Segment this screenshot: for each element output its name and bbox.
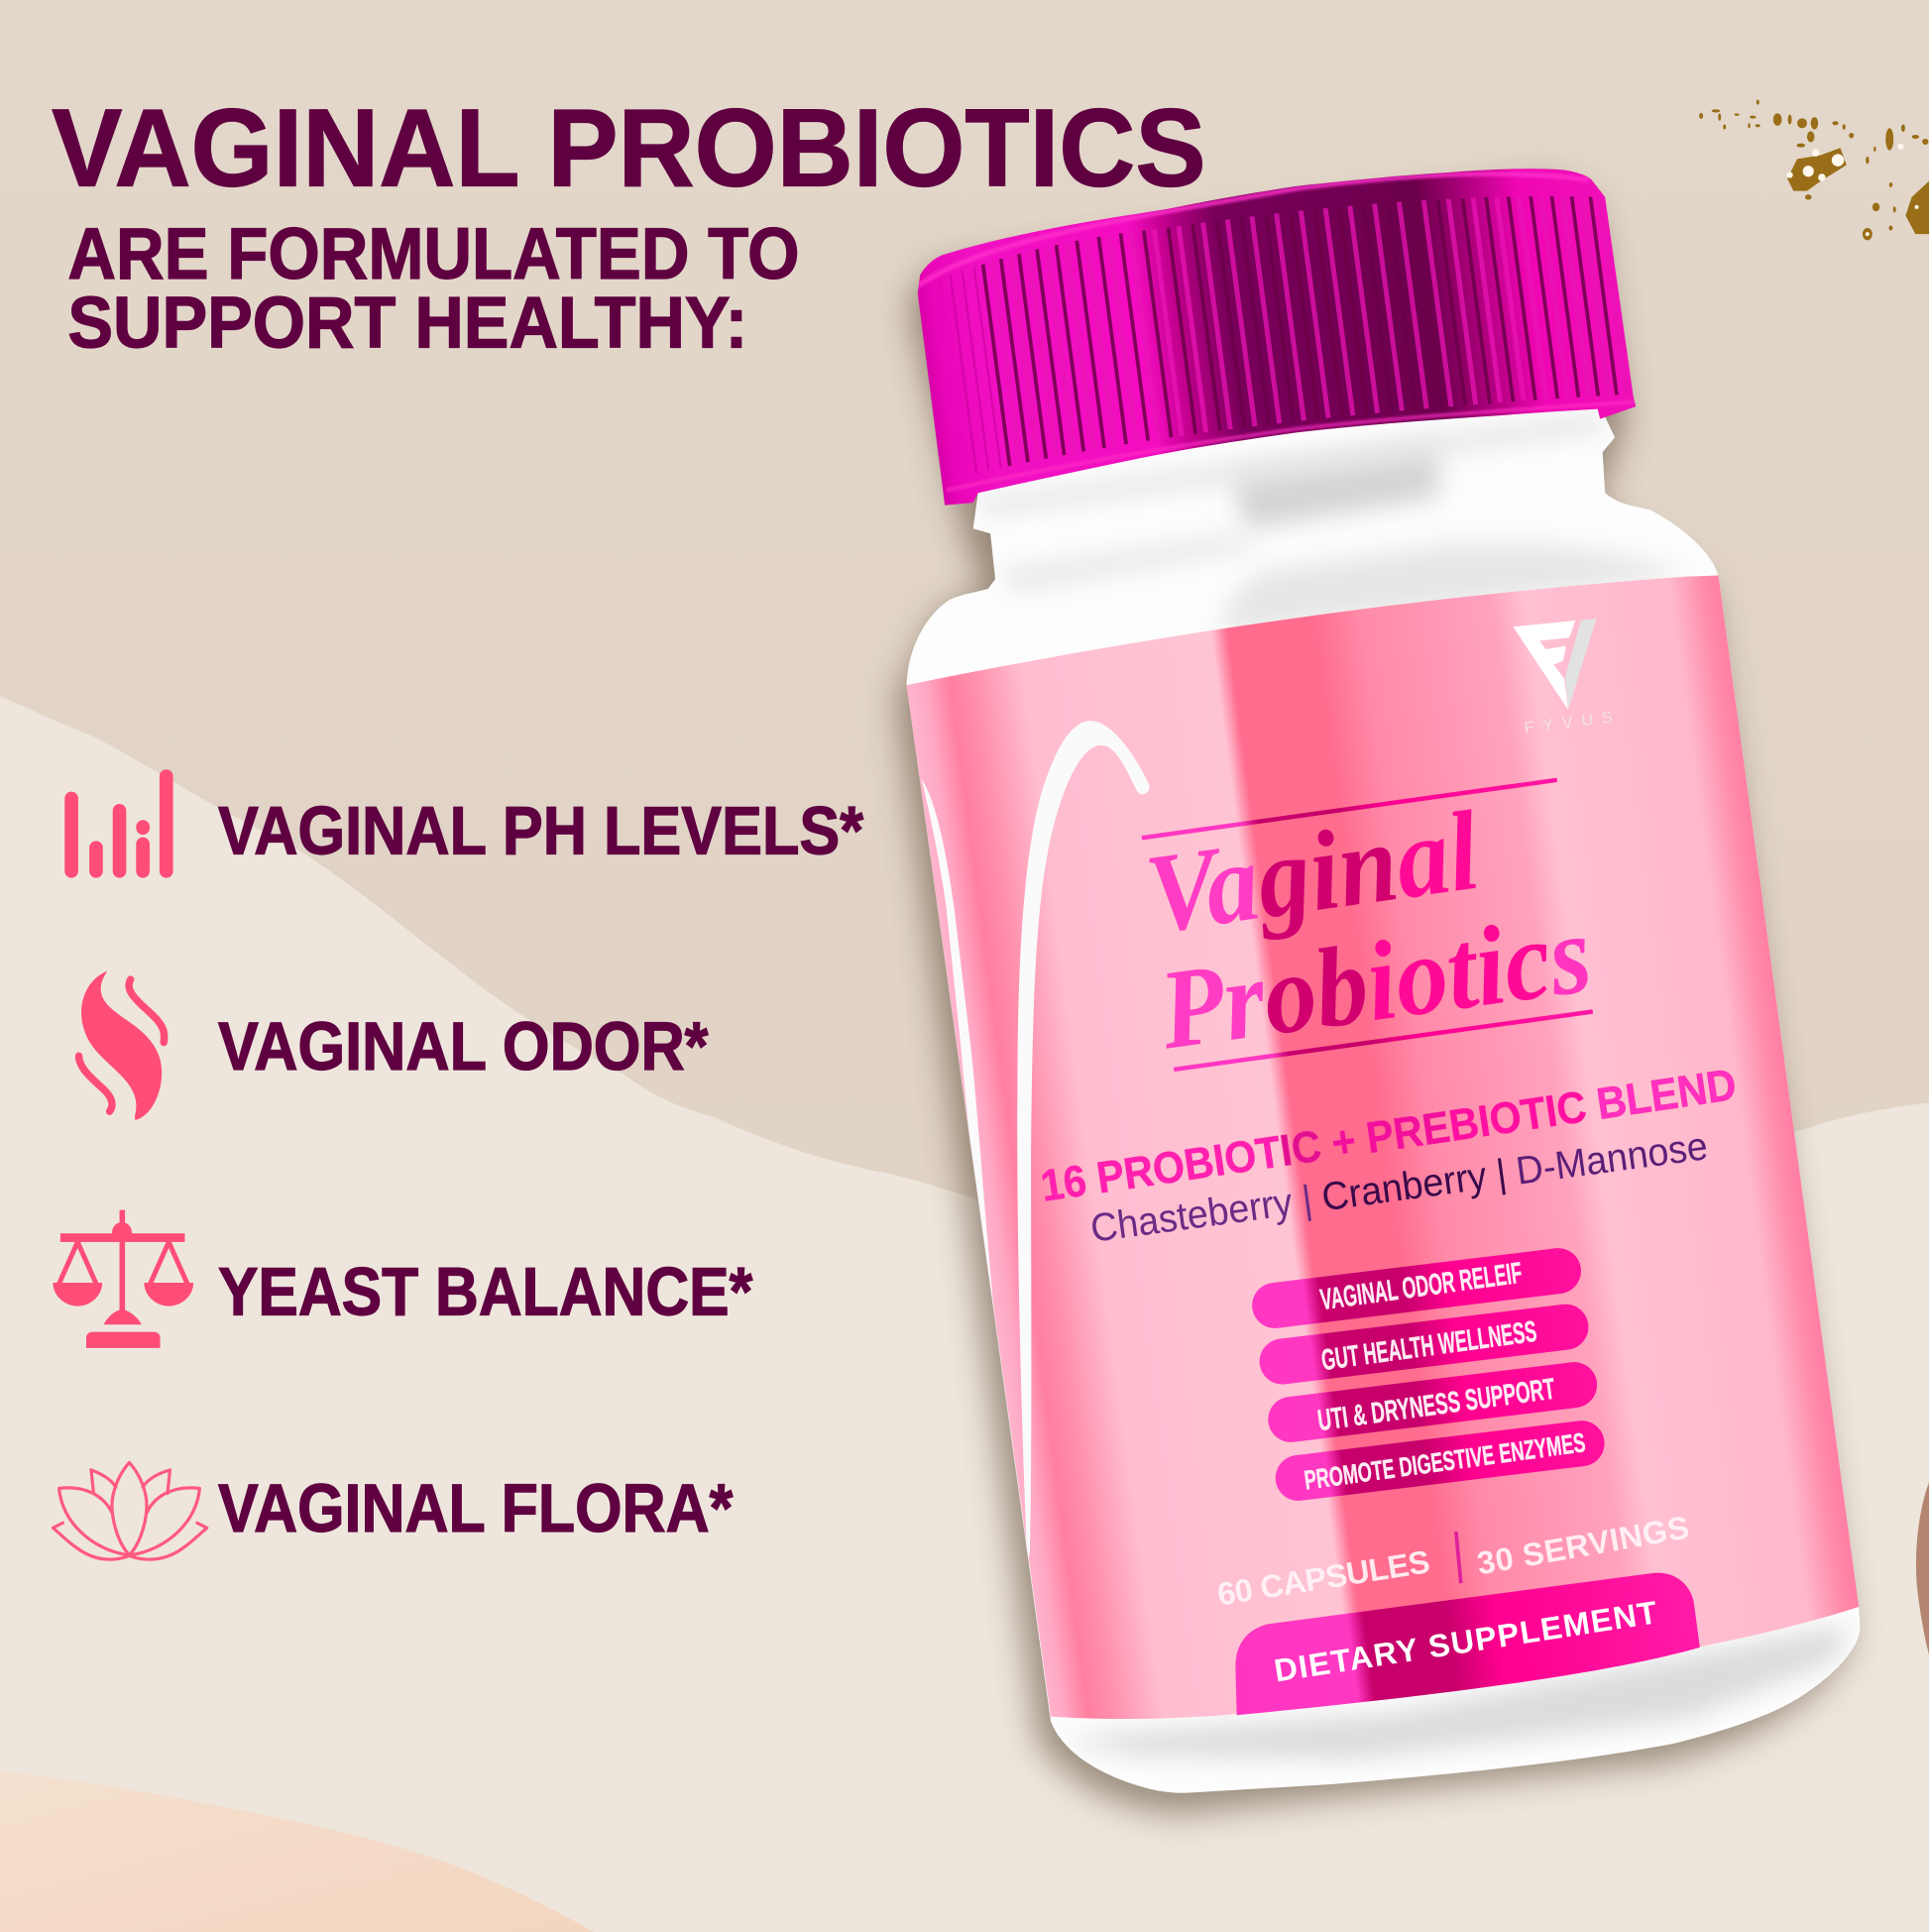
bottle label [907, 575, 1859, 1719]
bottle body [907, 406, 1860, 1793]
product title: Vaginal [1139, 787, 1486, 958]
benefit pill: digestive enzymes [1299, 1426, 1587, 1496]
icon: balance scales [53, 1210, 193, 1348]
capsule and serving count: 30 SERVINGS [1474, 1509, 1692, 1581]
heading: Vaginal Probiotics: VAGINAL PROBIOTICS [52, 86, 1206, 210]
blend headline: 16 PROBIOTIC + PREBIOTIC BLEND [1038, 1060, 1740, 1211]
product bottle [905, 169, 1860, 1793]
text: pH levels: VAGINAL PH LEVELS* [218, 793, 863, 868]
bottle cap [905, 169, 1656, 506]
background: cream wave [0, 696, 1929, 1932]
benefit pill: gut health [1283, 1315, 1565, 1377]
background: brown edge shape [1916, 1482, 1929, 1654]
subheading: SUPPORT HEALTHY: [67, 283, 747, 364]
dietary supplement tab [1235, 1573, 1700, 1715]
brand logo: FYVUS [1524, 708, 1614, 738]
subheading [67, 213, 799, 364]
icon: lotus flower [53, 1462, 207, 1559]
subheading: ARE FORMULATED TO [67, 213, 799, 294]
cap rim highlights [918, 173, 1636, 491]
benefit pill: odor relief [1275, 1257, 1558, 1316]
brand logo [1513, 619, 1614, 738]
benefit pill: digestive enzymes: PROMOTE DIGESTIVE ENZYMES [1303, 1426, 1587, 1496]
gold glitter splatter [1699, 100, 1929, 240]
icon: odor flame [79, 970, 165, 1120]
benefit pill: gut health: GUT HEALTH WELLNESS [1319, 1315, 1538, 1377]
benefit pill: odor relief: VAGINAL ODOR RELEIF [1318, 1257, 1524, 1316]
text: flora: VAGINAL FLORA* [218, 1471, 734, 1546]
label white swoosh [922, 721, 1149, 1565]
product title [1139, 780, 1598, 1074]
benefit pill: UTI dryness: UTI & DRYNESS SUPPORT [1315, 1373, 1557, 1437]
cap shell [918, 169, 1636, 506]
benefit pill: UTI dryness [1291, 1373, 1574, 1437]
gold glitter highlights [1786, 144, 1919, 236]
icon: bar levels [71, 776, 167, 871]
background: peach corner [0, 1771, 594, 1932]
dietary supplement tab: DIETARY SUPPLEMENT [1272, 1594, 1659, 1689]
bottle plastic shading [973, 412, 1848, 1760]
cap ribs [905, 295, 1656, 396]
text: odor: VAGINAL ODOR* [218, 1009, 709, 1084]
capsule and serving count [1215, 1509, 1692, 1613]
text: yeast balance: YEAST BALANCE* [218, 1254, 753, 1329]
bottle drop shadow [897, 182, 1850, 1814]
capsule and serving count: 60 CAPSULES [1215, 1543, 1432, 1613]
ingredient line: Chasteberry | Cranberry | D-Mannose [1088, 1124, 1710, 1251]
product title: Probiotics [1152, 889, 1598, 1074]
